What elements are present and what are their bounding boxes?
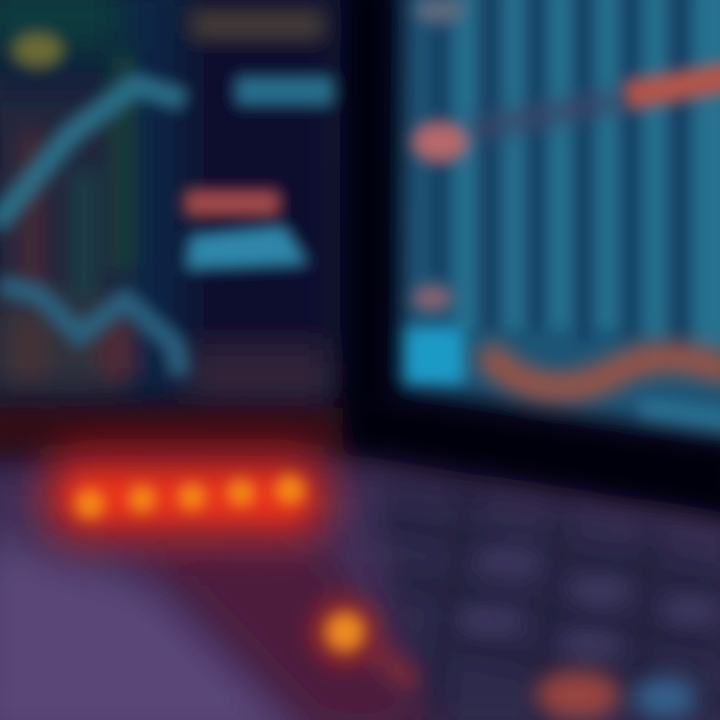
chart: faint red line bbox=[470, 100, 620, 130]
chart: teal lower band bbox=[640, 408, 720, 422]
key: red key bbox=[536, 671, 620, 719]
chart: lit key tops bbox=[455, 546, 718, 659]
chart: teal trend line bbox=[0, 85, 185, 225]
icon: yellow marker bbox=[12, 32, 64, 68]
chart: teal lower line bbox=[0, 285, 180, 375]
chart: key rows bbox=[380, 480, 720, 720]
text block: red label bbox=[185, 190, 280, 216]
panel: right monitor bbox=[400, 0, 720, 440]
panel: horizontal bezel right bbox=[345, 395, 720, 520]
chart: green and red columns bbox=[12, 50, 134, 380]
icon: red-pink marker bbox=[412, 122, 468, 162]
icon: orange indicator bbox=[309, 596, 381, 668]
chart: lower orange band bbox=[485, 350, 720, 388]
icon: pink block cap bbox=[412, 286, 452, 310]
text block: orange-brown top label bbox=[190, 10, 325, 40]
panel: horizontal bezel left bbox=[0, 405, 350, 455]
key: blue key bbox=[633, 678, 697, 718]
icon: bright cyan block bbox=[404, 328, 464, 384]
chart: vertical table columns bbox=[432, 0, 686, 350]
panel: vertical bezel bbox=[345, 0, 393, 410]
chart: red trend line bbox=[625, 76, 720, 96]
text block: teal label bbox=[235, 76, 335, 106]
panel: dark red shadow diagonal bbox=[130, 540, 440, 720]
key: red streak bbox=[375, 650, 415, 685]
panel: left monitor bbox=[0, 0, 340, 410]
icon: top pink marker bbox=[414, 0, 466, 24]
icon: LED dots bbox=[76, 476, 304, 518]
icon: red LED glow bbox=[40, 445, 335, 545]
text block: teal band bbox=[185, 225, 310, 270]
panel: keyboard base bbox=[0, 470, 720, 720]
